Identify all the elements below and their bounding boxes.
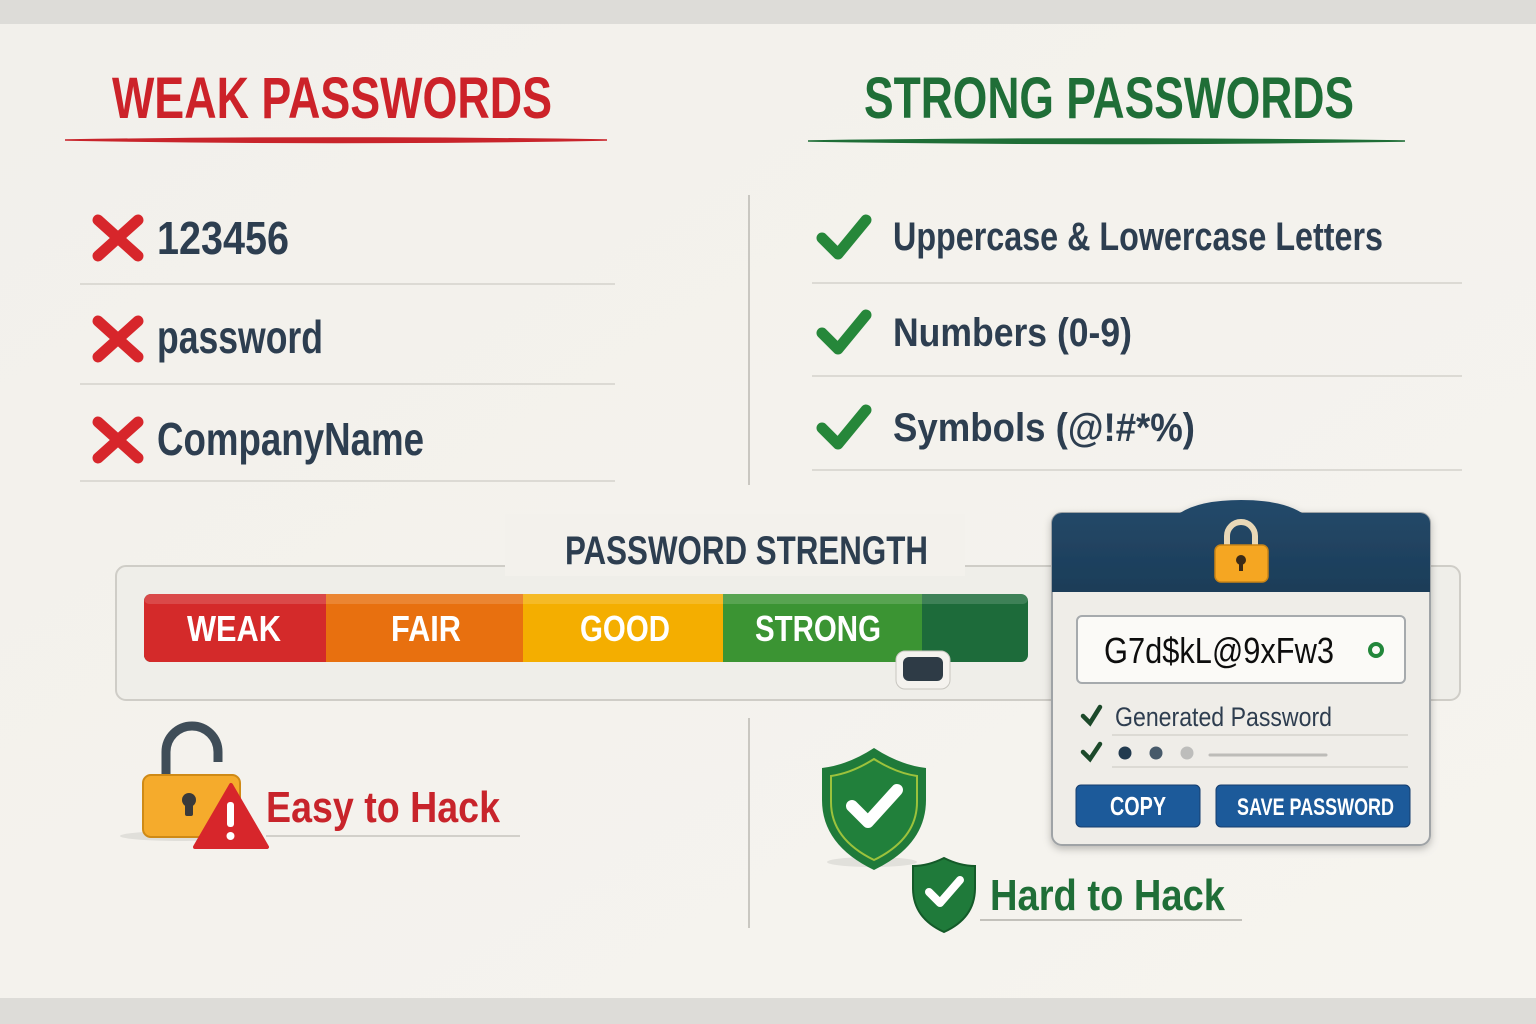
item: numbers: Numbers (0-9) — [893, 311, 1132, 355]
item: 123456: 123456 — [157, 212, 289, 264]
callout: easy to hack: Easy to Hack — [266, 783, 500, 832]
generated password row: Generated Password — [1115, 702, 1332, 732]
icon: small shield — [913, 858, 975, 932]
panel: password generator popup — [1052, 500, 1430, 845]
item: uppercase & lowercase: Uppercase & Lowercase Letters — [893, 215, 1383, 259]
item: password — [98, 311, 323, 363]
strength bar: WEAK — [187, 608, 281, 649]
title: strong passwords: STRONG PASSWORDS — [864, 66, 1354, 131]
heading: password strength: PASSWORD STRENGTH — [565, 529, 928, 573]
title: weak passwords: WEAK PASSWORDS — [112, 66, 552, 131]
item: symbols: Symbols (@!#*%) — [893, 406, 1195, 450]
list: weak password examples — [80, 212, 615, 481]
password input — [1077, 616, 1405, 683]
icon: orange lock — [1215, 522, 1268, 582]
title: strong passwords — [808, 66, 1405, 144]
password input: G7d$kL@9xFw3 — [1104, 630, 1334, 671]
callout: easy to hack — [120, 726, 520, 847]
button: save password: SAVE PASSWORD — [1237, 794, 1394, 821]
slider knob — [896, 651, 950, 689]
popup header — [1052, 500, 1430, 592]
item: CompanyName: CompanyName — [157, 413, 424, 465]
button: copy — [1076, 785, 1200, 827]
icon: open lock with warning — [120, 726, 267, 847]
strength bar: FAIR — [391, 608, 461, 649]
strength bar: STRONG — [755, 608, 881, 649]
icon: large shield — [822, 748, 926, 870]
strength bar — [144, 594, 1028, 662]
button: copy: COPY — [1110, 791, 1166, 821]
panel: password strength meter — [116, 514, 1460, 700]
list: strong password rules — [812, 215, 1462, 470]
button: save password — [1216, 785, 1410, 827]
item: password: password — [157, 311, 323, 363]
callout: hard to hack — [822, 748, 1242, 932]
generated password row — [1083, 702, 1408, 767]
item: 123456 — [98, 212, 289, 264]
title: weak passwords — [65, 66, 607, 142]
item: CompanyName — [98, 413, 424, 465]
strength bar: GOOD — [580, 608, 670, 649]
callout: hard to hack: Hard to Hack — [990, 871, 1225, 920]
